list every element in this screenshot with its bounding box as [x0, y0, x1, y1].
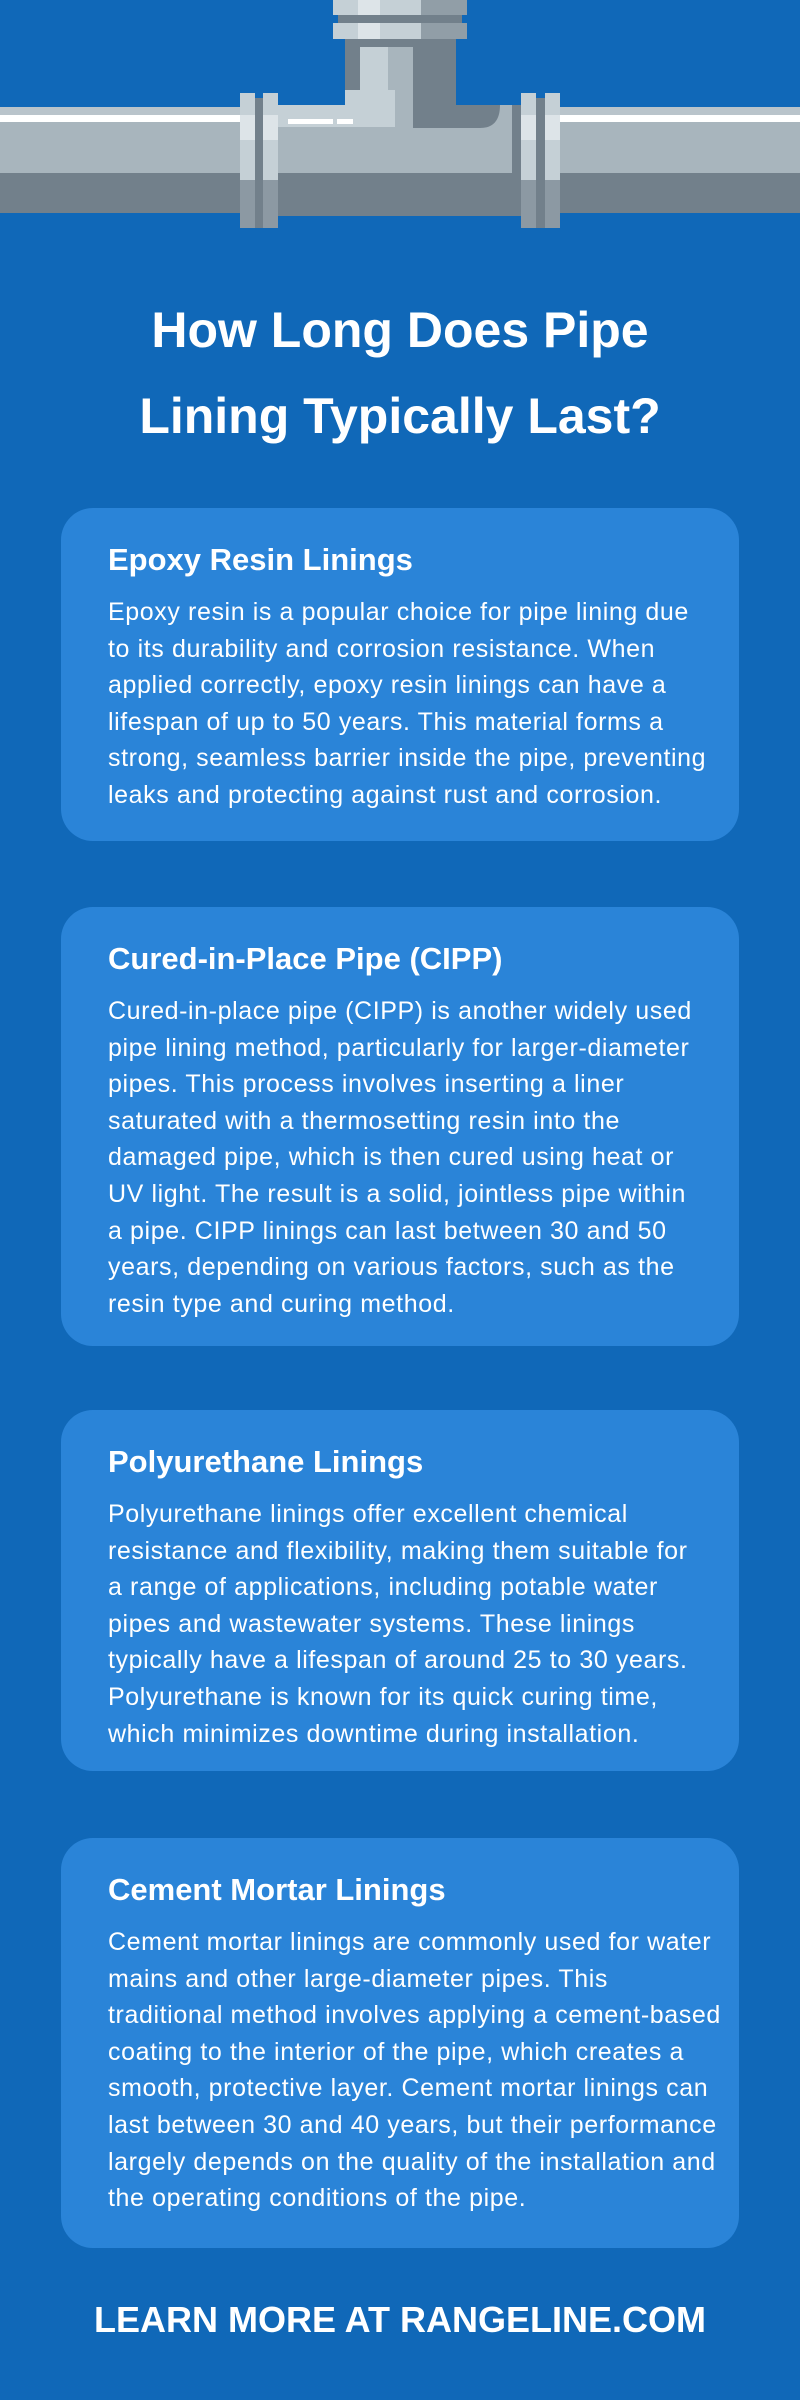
pipe illustration [0, 0, 800, 228]
panel: polyurethane linings [61, 1410, 739, 1771]
text: cement mortar: last between 30 and 40 years, but their performance [108, 2111, 717, 2139]
text: polyurethane: which minimizes downtime during installation. [108, 1720, 639, 1748]
text: cement mortar [108, 1928, 721, 2212]
text: epoxy: Epoxy resin is a popular choice for pipe lining due [108, 598, 689, 626]
title [139, 302, 661, 444]
text: polyurethane: Polyurethane linings offer excellent chemical [108, 1500, 628, 1528]
panel: epoxy resin linings [61, 508, 739, 841]
text: CIPP: damaged pipe, which is then cured using heat or [108, 1143, 674, 1171]
title: How Long Does Pipe [151, 302, 649, 358]
title: Lining Typically Last? [139, 388, 661, 444]
text: polyurethane: Polyurethane is known for its quick curing time, [108, 1683, 658, 1711]
text: CIPP: a pipe. CIPP linings can last between 30 and 50 [108, 1217, 667, 1245]
text: cement mortar: mains and other large-diameter pipes. This [108, 1965, 608, 1993]
panel: CIPP [61, 907, 739, 1346]
text: CIPP: saturated with a thermosetting resin into the [108, 1107, 620, 1135]
vertical branch [333, 0, 467, 130]
text: cement mortar: traditional method involves applying a cement-based [108, 2001, 721, 2029]
text: cement mortar: coating to the interior of the pipe, which creates a [108, 2038, 684, 2066]
text: cement mortar: smooth, protective layer. Cement mortar linings can [108, 2074, 708, 2102]
footer call to action: LEARN MORE AT RANGELINE.COM [94, 2299, 706, 2340]
text: polyurethane: resistance and flexibility, making them suitable for [108, 1537, 688, 1565]
text: polyurethane: a range of applications, including potable water [108, 1573, 658, 1601]
text: CIPP: years, depending on various factors, such as the [108, 1253, 675, 1281]
heading: epoxy: Epoxy Resin Linings [108, 542, 413, 577]
panel: cement mortar linings [61, 1838, 739, 2248]
text: cement mortar: largely depends on the quality of the installation and [108, 2148, 716, 2176]
text: polyurethane: typically have a lifespan of around 25 to 30 years. [108, 1646, 688, 1674]
text: CIPP: resin type and curing method. [108, 1290, 455, 1318]
text: cement mortar: the operating conditions of the pipe. [108, 2184, 526, 2212]
heading: CIPP: Cured-in-Place Pipe (CIPP) [108, 941, 502, 976]
text: epoxy: strong, seamless barrier inside the pipe, preventing [108, 744, 706, 772]
text: epoxy: leaks and protecting against rust and corrosion. [108, 781, 662, 809]
text: CIPP [108, 997, 692, 1318]
text: cement mortar: Cement mortar linings are commonly used for water [108, 1928, 711, 1956]
text: CIPP: pipes. This process involves inserting a liner [108, 1070, 624, 1098]
text: epoxy: to its durability and corrosion resistance. When [108, 635, 655, 663]
main pipe [0, 107, 800, 213]
heading: polyurethane: Polyurethane Linings [108, 1444, 423, 1479]
flanges [240, 93, 560, 228]
text: CIPP: UV light. The result is a solid, jointless pipe within [108, 1180, 686, 1208]
text: polyurethane: pipes and wastewater systems. These linings [108, 1610, 635, 1638]
text: epoxy: lifespan of up to 50 years. This material forms a [108, 708, 664, 736]
text: CIPP: pipe lining method, particularly for larger-diameter [108, 1034, 689, 1062]
heading: cement mortar: Cement Mortar Linings [108, 1872, 446, 1907]
text: epoxy: applied correctly, epoxy resin linings can have a [108, 671, 666, 699]
text: CIPP: Cured-in-place pipe (CIPP) is another widely used [108, 997, 692, 1025]
tee body [278, 90, 512, 216]
text: polyurethane [108, 1500, 688, 1748]
text: epoxy [108, 598, 706, 809]
